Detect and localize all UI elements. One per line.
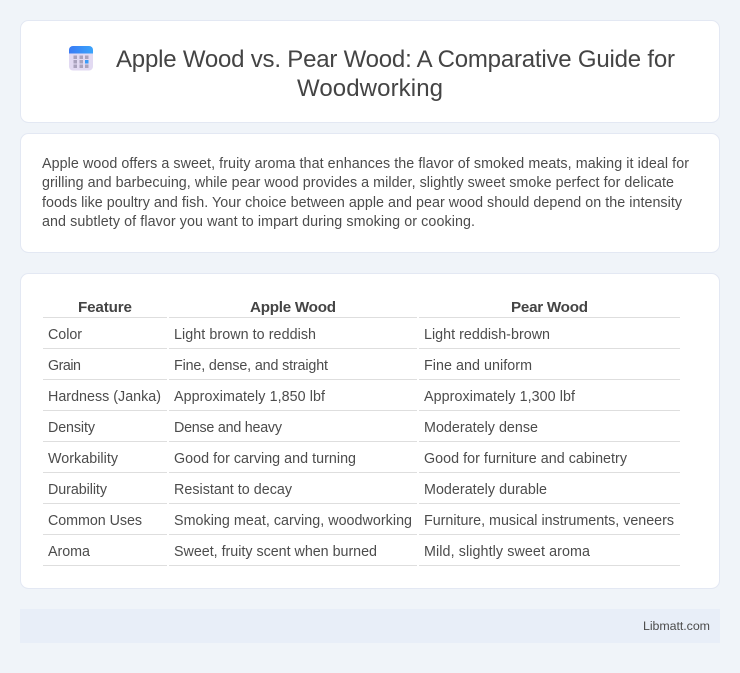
icon: calendar <box>69 46 93 70</box>
row: aroma: Mild, slightly sweet aroma <box>424 544 590 560</box>
row: color: Color <box>48 327 82 343</box>
row: durability <box>48 482 547 498</box>
panel: summary <box>20 134 720 252</box>
row: density: Density <box>48 420 96 436</box>
panel: header <box>20 20 720 122</box>
row: density <box>48 420 538 436</box>
footer text: Libmatt.com <box>643 619 710 633</box>
row: color: Light reddish-brown <box>424 327 550 343</box>
table header row <box>78 299 588 316</box>
row: grain <box>48 358 532 374</box>
row: density: Moderately dense <box>424 420 538 436</box>
title: Woodworking <box>297 75 443 102</box>
row: hardness: Hardness (Janka) <box>48 389 161 405</box>
row: workability <box>48 451 628 467</box>
text block: summary: Apple wood offers a sweet, fruity aroma that enhances the flavor of smoked meats, making it ideal for <box>42 156 689 172</box>
table header row: Feature <box>78 299 132 316</box>
footer bar <box>20 609 720 643</box>
row: durability: Durability <box>48 482 108 498</box>
row: grain: Fine, dense, and straight <box>174 358 328 374</box>
row: durability: Moderately durable <box>424 482 547 498</box>
title <box>116 46 675 102</box>
row: durability: Resistant to decay <box>174 482 293 498</box>
panel: comparison table <box>20 274 720 588</box>
row: hardness: Approximately 1,300 lbf <box>424 389 575 405</box>
row: grain: Grain <box>48 358 81 374</box>
row: density: Dense and heavy <box>174 420 283 436</box>
row: hardness <box>48 389 575 405</box>
table header row: Pear Wood <box>511 299 588 316</box>
row: common uses <box>48 513 674 529</box>
row: common uses: Common Uses <box>48 513 142 529</box>
row: workability: Good for carving and turning <box>174 451 356 467</box>
row: color <box>48 327 550 343</box>
row: workability: Good for furniture and cabinetry <box>424 451 628 467</box>
text block: summary: grilling and barbecuing, while pear wood provides a milder, slightly sweet smoke perfect for delicate <box>42 175 674 191</box>
row: workability: Workability <box>48 451 119 467</box>
text block: summary: and subtlety of flavor you want to impart during smoking or cooking. <box>42 214 475 230</box>
row: aroma: Aroma <box>48 544 90 560</box>
row: aroma: Sweet, fruity scent when burned <box>174 544 377 560</box>
row: common uses: Furniture, musical instruments, veneers <box>424 513 674 529</box>
row: hardness: Approximately 1,850 lbf <box>174 389 325 405</box>
row: color: Light brown to reddish <box>174 327 316 343</box>
text block: summary: foods like poultry and fish. Your choice between apple and pear wood should depend on the intensity <box>42 195 683 211</box>
table header row: Apple Wood <box>250 299 336 316</box>
row: grain: Fine and uniform <box>424 358 532 374</box>
row: aroma <box>48 544 590 560</box>
row: common uses: Smoking meat, carving, woodworking <box>174 513 412 529</box>
title: Apple Wood vs. Pear Wood: A Comparative Guide for <box>116 46 675 73</box>
text block: summary <box>42 156 689 230</box>
